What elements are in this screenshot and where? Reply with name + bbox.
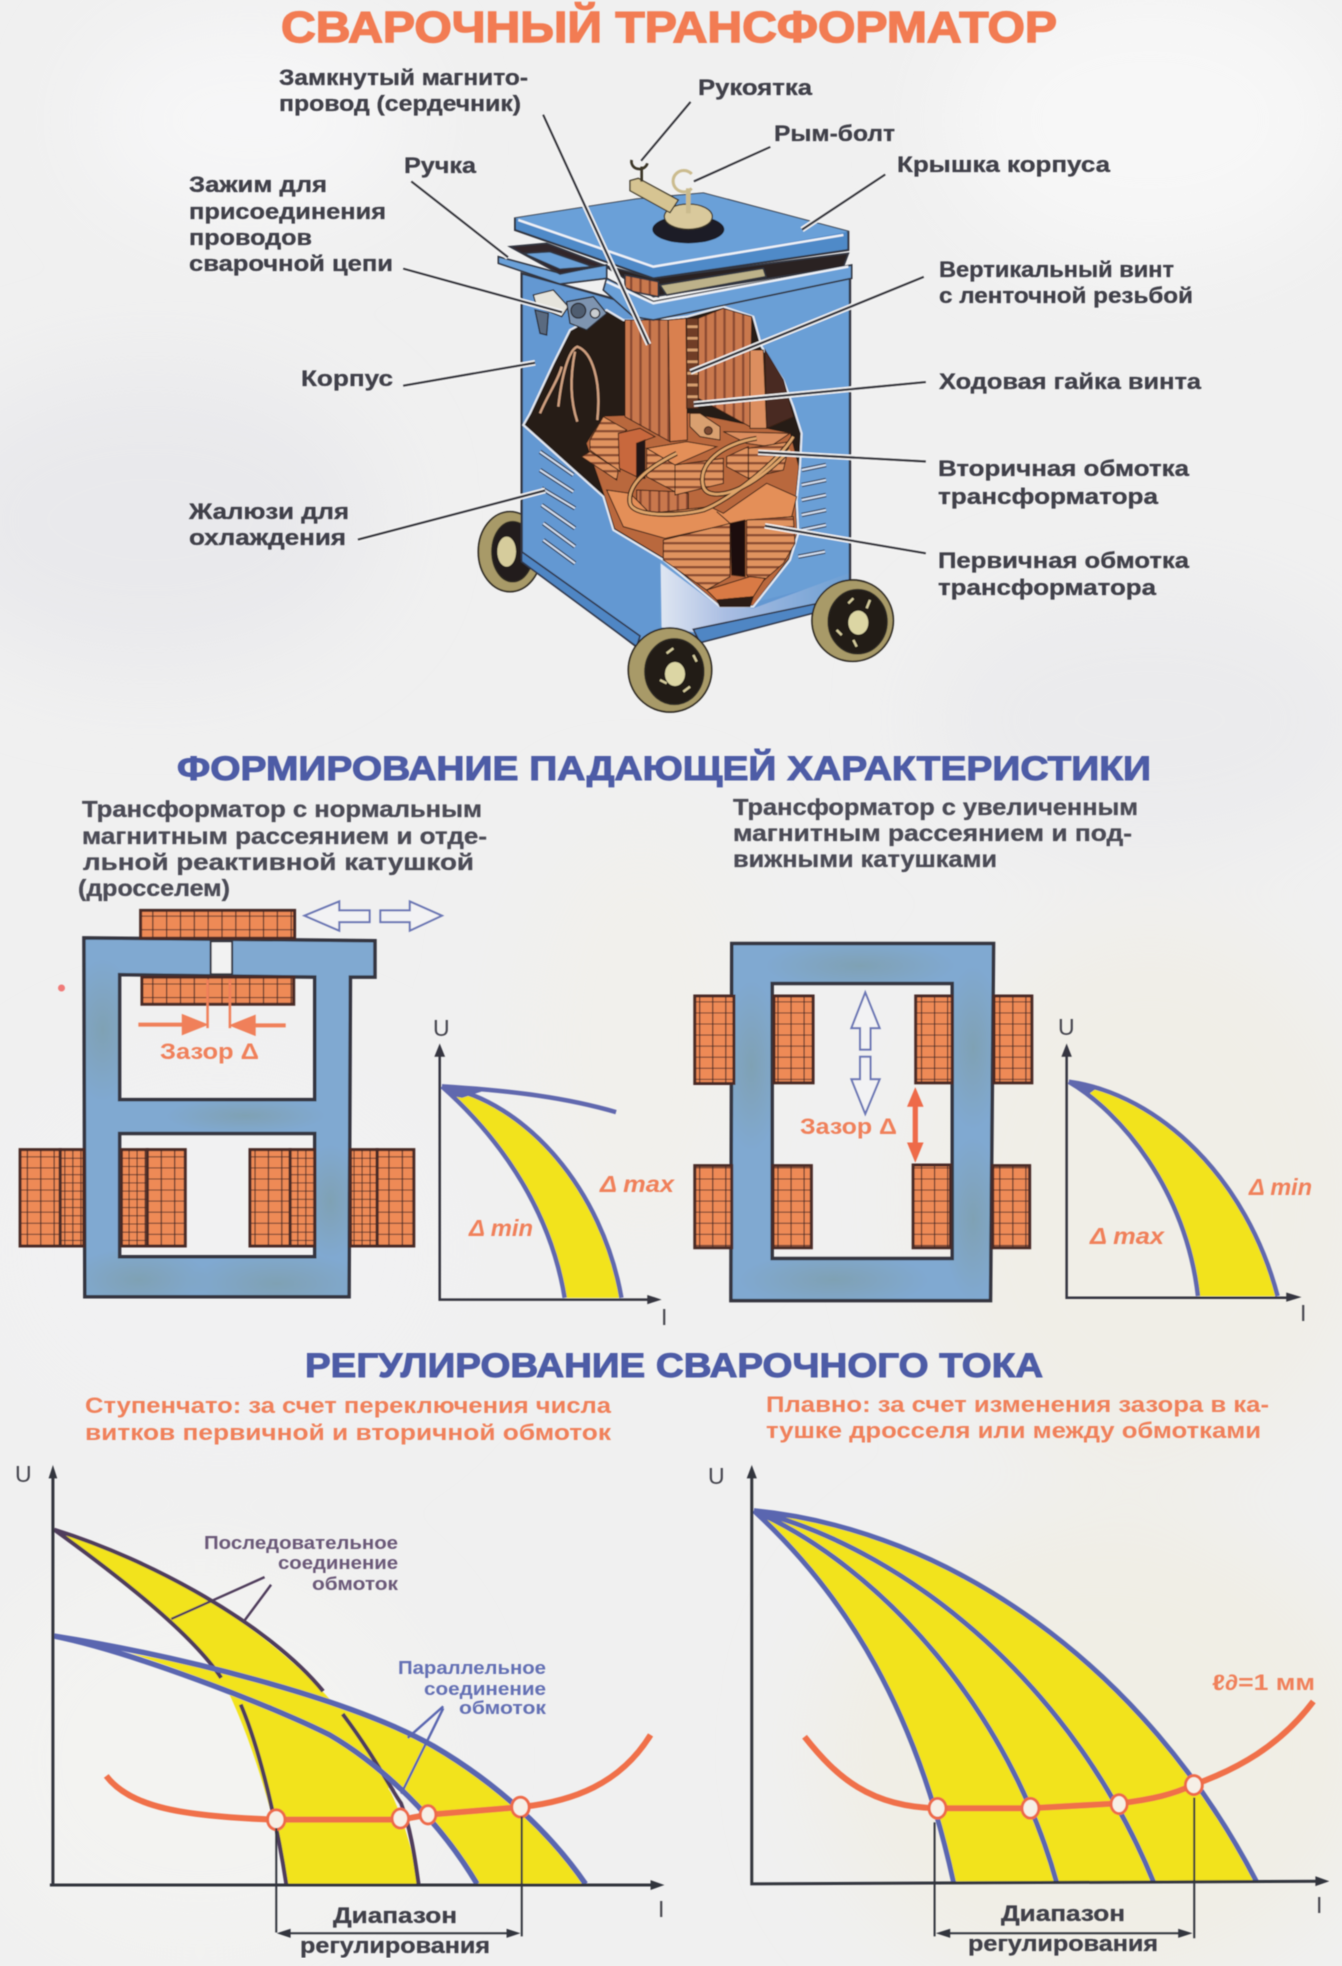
subheading: increased leakage transformer: Трансформатор с увеличенным	[733, 794, 1138, 820]
label: series connection: обмоток	[312, 1574, 399, 1594]
label: primary winding: Первичная обмотка	[938, 548, 1190, 573]
subheading: normal leakage transformer: льной реактивной катушкой	[83, 849, 474, 875]
air gap	[211, 941, 232, 974]
body casing	[522, 270, 850, 647]
chart: stepwise regulation	[49, 1465, 664, 1938]
subheading: normal leakage transformer: магнитным рассеянием и отде-	[82, 823, 487, 849]
series curves	[54, 1530, 419, 1884]
winding wires	[630, 437, 793, 514]
label: louvres: охлаждения	[189, 525, 346, 550]
label: terminal clamp: сварочной цепи	[189, 251, 393, 276]
gap arrows	[138, 979, 286, 1034]
label: delta min chart 2: Δ min	[1248, 1174, 1312, 1200]
coils	[695, 996, 1032, 1248]
parallel curves	[54, 1636, 585, 1884]
heading: falling characteristic: ФОРМИРОВАНИЕ ПАДАЮЩЕЙ ХАРАКТЕРИСТИКИ	[177, 749, 1151, 788]
heading: current regulation: РЕГУЛИРОВАНИЕ СВАРОЧНОГО ТОКА	[305, 1347, 1043, 1385]
label: series connection: соединение	[278, 1553, 398, 1573]
curves	[754, 1511, 1256, 1882]
subheading: increased leakage transformer: магнитным рассеянием и под-	[733, 820, 1132, 846]
label: magnetic core: Замкнутый магнито-	[279, 65, 528, 90]
label: terminal clamp: Зажим для	[189, 172, 327, 197]
range bracket	[935, 1798, 1194, 1938]
callout labels	[188, 65, 1202, 600]
label: gap right: Зазор Δ	[800, 1114, 897, 1139]
subheading: normal leakage transformer: (дросселем)	[78, 875, 230, 901]
base rail	[522, 552, 815, 647]
label: casing: Корпус	[301, 366, 393, 391]
secondary winding	[582, 413, 790, 513]
label: regulation range right: Диапазон	[1001, 1901, 1125, 1926]
casing rim and handle	[498, 243, 852, 320]
upper left wiring	[540, 347, 598, 422]
label: handle: Ручка	[404, 153, 477, 178]
subheading: normal leakage transformer: Трансформатор с нормальным	[82, 796, 482, 822]
cooling louvres	[540, 452, 826, 563]
axis I chart 3: I	[658, 1896, 664, 1922]
chart: smooth regulation	[747, 1465, 1329, 1938]
label: delta max chart 1: Δ max	[599, 1171, 675, 1197]
label: delta min chart 1: Δ min	[468, 1215, 533, 1241]
label: screw nut: Ходовая гайка винта	[939, 369, 1202, 394]
cutaway opening	[523, 307, 802, 607]
choke coils	[141, 910, 295, 1004]
parallel connection band	[130, 1653, 585, 1884]
axis U chart 4: U	[708, 1463, 725, 1489]
title: СВАРОЧНЫЙ ТРАНСФОРМАТОР	[281, 1, 1057, 52]
core	[67, 938, 375, 1316]
subheading: stepwise: витков первичной и вторичной обмоток	[85, 1420, 612, 1445]
subheading: smooth: Плавно: за счет изменения зазора в ка-	[766, 1392, 1269, 1417]
label: parallel connection: Параллельное	[398, 1658, 546, 1678]
transformer coils	[20, 1150, 414, 1246]
diagram: transformer with separate choke	[20, 901, 662, 1316]
label: vertical screw: Вертикальный винт	[939, 257, 1174, 282]
illustration: welding transformer cutaway	[478, 160, 893, 712]
load curve	[106, 1735, 651, 1820]
yellow region	[754, 1511, 1256, 1881]
label: primary winding: трансформатора	[938, 575, 1157, 600]
terminal clamp	[533, 290, 607, 335]
operating points	[929, 1776, 1202, 1818]
axis I chart 1: I	[661, 1304, 667, 1330]
label: terminal clamp: присоединения	[189, 199, 386, 224]
label: parallel connection: соединение	[424, 1679, 546, 1699]
gap arrow	[907, 1087, 924, 1163]
label: lever: Рукоятка	[698, 75, 813, 100]
diagram: transformer with moving coils	[695, 941, 1301, 1309]
label: lid: Крышка корпуса	[897, 152, 1111, 177]
series connection band	[54, 1530, 419, 1884]
label: regulation range left: Диапазон	[333, 1903, 457, 1928]
notch	[388, 1788, 419, 1817]
casing lid	[515, 193, 848, 278]
range bracket	[276, 1817, 522, 1938]
magnetic core	[625, 308, 793, 442]
label: gap left: Зазор Δ	[160, 1039, 259, 1064]
back wheel	[478, 512, 542, 592]
print speck	[58, 984, 65, 992]
pointers	[171, 1577, 443, 1794]
subheading: increased leakage transformer: вижными катушками	[733, 846, 997, 872]
primary winding	[607, 483, 797, 607]
characteristic chart	[434, 1044, 662, 1304]
leader lines	[358, 102, 926, 553]
label: magnetic core: провод (сердечник)	[279, 91, 521, 116]
label: terminal clamp: проводов	[189, 225, 312, 250]
label: louvres: Жалюзи для	[188, 499, 349, 524]
operating points	[268, 1797, 529, 1830]
front right wheel	[812, 580, 893, 661]
axis I chart 2: I	[1300, 1300, 1306, 1326]
axes	[747, 1465, 1329, 1886]
knob with lever and eyebolt	[630, 160, 724, 243]
label: secondary winding: Вторичная обмотка	[938, 456, 1190, 481]
label: vertical screw: с ленточной резьбой	[939, 283, 1193, 308]
label: delta max chart 2: Δ max	[1089, 1223, 1165, 1249]
label: parallel connection: обмоток	[459, 1698, 547, 1718]
load curve	[935, 1802, 1119, 1814]
movement arrows	[851, 992, 880, 1114]
axis U chart 2: U	[1058, 1014, 1075, 1040]
core	[721, 941, 1004, 1309]
label: eyebolt: Рым-болт	[774, 121, 895, 146]
subheading: smooth: тушке дросселя или между обмотками	[766, 1418, 1261, 1443]
front left wheel	[628, 628, 712, 712]
axis U chart 3: U	[15, 1461, 32, 1487]
axes	[49, 1465, 664, 1890]
label: regulation range left: регулирования	[300, 1933, 490, 1958]
characteristic chart	[1061, 1044, 1301, 1302]
subheading: stepwise: Ступенчато: за счет переключения числа	[85, 1393, 612, 1418]
axis U chart 1: U	[433, 1015, 450, 1041]
movement arrows	[304, 901, 442, 931]
label: series connection: Последовательное	[204, 1533, 398, 1553]
label: electrode size: ℓ∂=1 мм	[1212, 1670, 1315, 1695]
axis I chart 4: I	[1316, 1892, 1322, 1918]
label: secondary winding: трансформатора	[938, 484, 1159, 509]
copper backdrop inside cutaway	[587, 413, 798, 605]
label: regulation range right: регулирования	[968, 1931, 1158, 1956]
